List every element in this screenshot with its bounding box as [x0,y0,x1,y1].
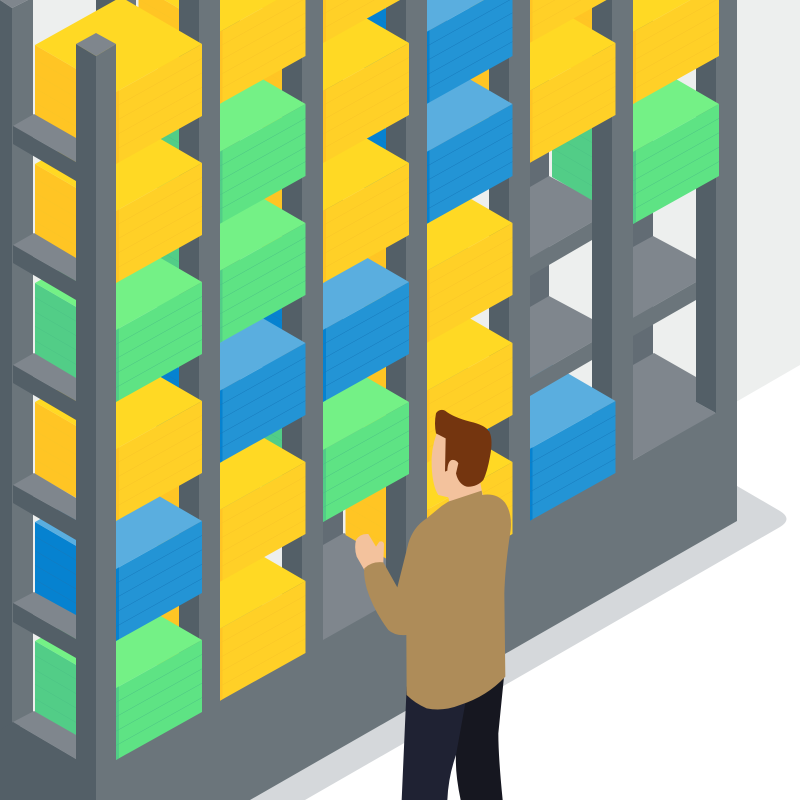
shelves: column 6 [633,0,716,460]
boxes: column 2 [138,0,306,701]
shelves: column 4 [427,0,489,470]
rear stub post [96,0,136,20]
shelves: column 2 [220,0,303,700]
post 3 [282,0,323,653]
man: right trouser leg [453,673,504,800]
floor shadow [200,486,786,800]
man: left trouser leg [402,687,468,800]
left ladder uprights [0,0,33,740]
man: hair [435,410,492,487]
frame base [96,400,737,800]
post 4 [386,0,427,593]
post 2 [179,0,220,713]
boxes: column 6 [552,0,719,224]
boxes: column 1 [35,0,202,760]
shelves: column 5 [530,0,592,410]
man: face and neck [432,430,483,505]
ladder crossbars [0,114,96,800]
boxes: column 5 [448,0,616,521]
post 6 [592,0,633,473]
boxes: column 4 [346,0,512,582]
post 5 [489,0,530,533]
man: sweater [364,491,511,709]
man [355,410,511,800]
man: hand [355,534,384,570]
rear right post [696,0,737,521]
front post [76,33,116,800]
boxes: column 3 [242,0,409,522]
shelves: column 3 [323,0,406,640]
shelf and bar in front of blue box, column 5 [530,296,592,396]
